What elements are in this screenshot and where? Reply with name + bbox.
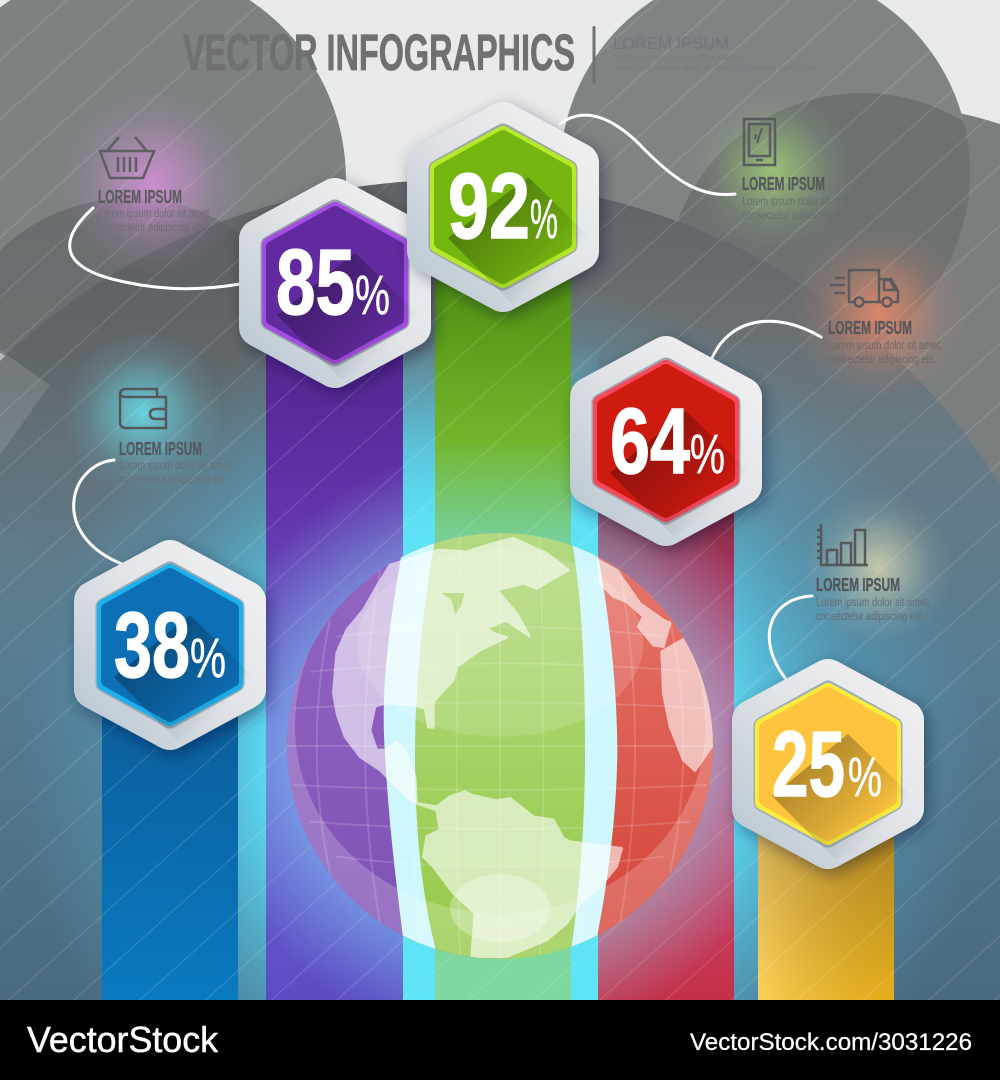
badge: green 92%: % (530, 187, 558, 250)
subtitle text (614, 52, 818, 72)
text: wallet label: LOREM IPSUM (119, 439, 202, 459)
title heading: VECTOR INFOGRAPHICS (183, 24, 575, 81)
connector: yellow to chart (769, 596, 812, 678)
text: phone label: consectetur adipiscing elit. (742, 210, 850, 222)
icon: wallet (120, 389, 166, 428)
badge: red 64%: % (690, 422, 725, 485)
text: basket label (98, 187, 212, 234)
badge: yellow 25%: 25 (772, 712, 845, 816)
glow on bars around the globe (266, 473, 734, 1000)
badge: yellow 25%: % (848, 745, 882, 808)
text: basket label: Lorem ipsum dolor sit amet, (98, 208, 212, 220)
footer band (0, 1000, 1000, 1080)
globe: grid lines (287, 533, 713, 958)
continents (333, 538, 713, 957)
badge: red 64%: 64 (610, 389, 690, 493)
text: phone label: LOREM IPSUM (742, 174, 825, 194)
badge: blue 38%: 38 (114, 593, 190, 697)
text: chart label (816, 575, 930, 623)
text: truck label: consectetur adipiscing elit. (828, 354, 936, 366)
text: truck label: LOREM IPSUM (828, 318, 912, 338)
globe: red side (580, 548, 713, 944)
connector: purple to basket (70, 208, 240, 289)
globe: purple side (280, 520, 513, 967)
connector lines (70, 115, 821, 678)
badge: purple 85% (259, 198, 431, 401)
glow: wallet (61, 331, 225, 495)
glow: phone (693, 90, 853, 250)
globe: green centre (407, 520, 597, 967)
title (183, 24, 818, 84)
title divider (592, 26, 596, 84)
continent: North America (333, 538, 568, 803)
badge: blue 38%: % (190, 626, 226, 689)
continent: Europe (598, 560, 670, 647)
subtitle: LOREM IPSUM (613, 34, 729, 53)
cyan gaps between bars (403, 340, 598, 1000)
globe: right refracted band (572, 546, 618, 946)
globe: left refracted band (384, 543, 435, 949)
text: wallet label: Lorem ipsum dolor sit amet, (119, 460, 233, 472)
badge: purple 85%: 85 (276, 230, 355, 334)
glow: chart (802, 491, 954, 643)
badge: red 64% (590, 356, 762, 559)
bar: yellow 25% (758, 830, 894, 1000)
badge: purple 85%: % (355, 263, 390, 326)
glow: basket (61, 91, 245, 275)
text: basket label: LOREM IPSUM (98, 187, 182, 207)
icon: bar chart (817, 524, 868, 565)
icon: phone (744, 119, 775, 165)
continent: Africa (662, 638, 713, 771)
footer: image id: VectorStock.com/3031226 (690, 1029, 972, 1056)
globe: bottom crescent highlight (287, 652, 713, 959)
text: chart label: LOREM IPSUM (816, 575, 900, 595)
footer: brand: VectorStock (27, 1019, 219, 1060)
connector: green to phone (560, 115, 735, 195)
globe (280, 520, 720, 973)
text: chart label: Lorem ipsum dolor sit amet, (816, 597, 930, 609)
subtitle text: diam velit ornare ante, id suscipit nisi erat eget diam (614, 62, 818, 72)
globe: bottom spot highlight (450, 874, 550, 942)
icon: truck (830, 270, 898, 306)
text: phone label (742, 174, 856, 222)
text: truck label (828, 318, 942, 366)
badge: green 92% (427, 122, 599, 325)
connector: blue to wallet (74, 460, 122, 564)
continent: South America (417, 792, 622, 957)
bars (102, 280, 894, 1046)
badge: blue 38% (94, 560, 266, 763)
text: chart label: consectetur adipiscing elit. (816, 611, 924, 623)
subtitle text: Morbi fermentum, velit at faucibus pharetra (614, 52, 742, 62)
bar: purple 85% (266, 350, 403, 1000)
globe: top highlight (357, 550, 643, 737)
icon: basket (100, 137, 154, 178)
bar: red 64% (598, 510, 734, 1000)
connector: red to truck (712, 321, 821, 358)
text: wallet label (119, 439, 233, 486)
text: phone label: Lorem ipsum dolor sit amet, (742, 196, 856, 208)
text: basket label: consectetur adipiscing elit. (98, 222, 206, 234)
glow: truck (792, 225, 968, 401)
bar: blue 38% (102, 700, 238, 1000)
text: truck label: Lorem ipsum dolor sit amet, (828, 340, 942, 352)
bar: green 92% (435, 280, 571, 1000)
badge: green 92%: 92 (448, 154, 530, 258)
text: wallet label: consectetur adipiscing elit. (119, 474, 227, 486)
badge: yellow 25% (752, 679, 924, 882)
